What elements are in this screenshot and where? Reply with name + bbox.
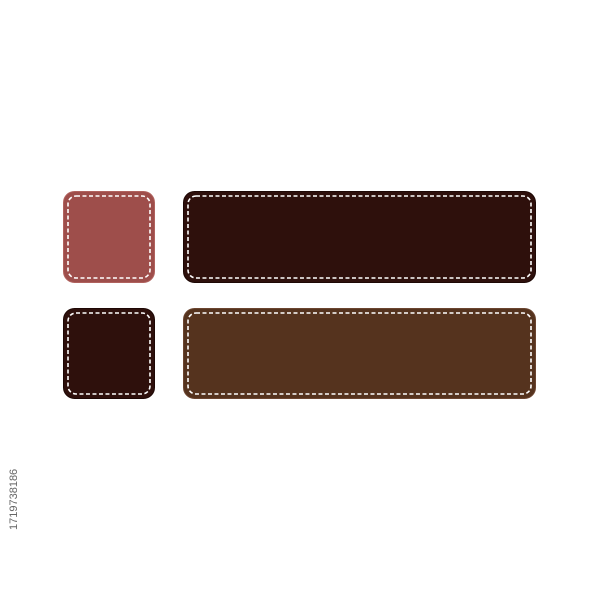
label: bottom-left square [64,308,154,398]
label: bottom long bar [184,308,536,398]
watermark id text: 1719738186 [8,469,20,530]
label: top long bar [184,192,536,282]
label: top-left square [64,192,154,282]
